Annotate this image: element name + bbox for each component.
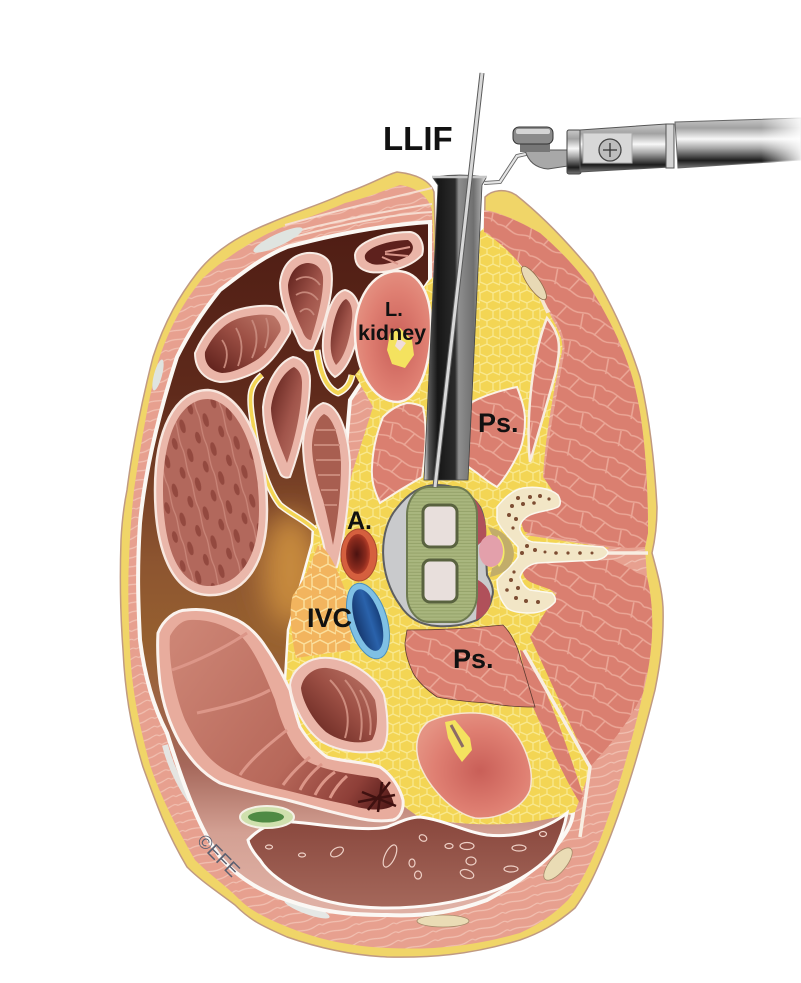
midline and lateral fascia lines — [524, 553, 648, 837]
tendon, left — [150, 359, 166, 391]
collar — [567, 130, 581, 174]
large colon, ascending — [155, 390, 267, 595]
retroperitoneal fat — [285, 228, 610, 824]
tendon, lower left — [165, 745, 190, 800]
upper wall layers — [278, 188, 432, 240]
elbow joint — [525, 150, 568, 169]
flank muscle and upper erector spinae — [484, 212, 648, 548]
retractor tube — [424, 175, 487, 480]
label: L. kidney: kidney — [358, 321, 426, 345]
label: LLIF: LLIF — [383, 120, 453, 157]
loop f — [303, 403, 350, 568]
shaft — [675, 118, 801, 168]
descending colon — [158, 609, 403, 821]
handle body — [580, 124, 670, 172]
loop a — [355, 232, 423, 272]
bone nodule, lower right — [539, 844, 577, 884]
subcutaneous fat layer — [120, 172, 663, 957]
label: A.: A. — [347, 507, 372, 535]
vertebral disc — [383, 485, 493, 626]
peritoneal cavity — [138, 222, 573, 915]
retractor arm and instrument handle — [484, 116, 801, 183]
label: L. kidney — [358, 299, 426, 345]
loop d — [323, 290, 360, 377]
left kidney — [355, 271, 431, 402]
cross-section of the body — [120, 172, 663, 957]
lower erector spinae — [523, 560, 652, 767]
abdominal wall muscle — [128, 185, 652, 949]
quadratus lumborum strip — [520, 650, 583, 803]
jejunal loop — [290, 658, 388, 752]
psoas muscle, lower — [405, 625, 535, 707]
ring — [666, 124, 674, 168]
tendon, bottom — [283, 896, 331, 922]
lower window — [423, 560, 457, 602]
plate — [583, 133, 632, 163]
white edge of mesenteric fat — [285, 527, 313, 680]
aponeurosis nodule — [518, 263, 550, 303]
cream fascia wedge — [488, 226, 550, 312]
thecal sac — [479, 535, 503, 567]
small bowel loops — [195, 232, 423, 568]
liver — [248, 813, 567, 908]
right kidney — [417, 713, 531, 818]
label: L. kidney: L. — [385, 299, 403, 321]
bone nodule, bottom — [417, 915, 469, 927]
upper window — [423, 505, 457, 547]
interbody cage implant — [407, 487, 477, 622]
connecting arm — [484, 153, 530, 183]
orange mesenteric fat — [291, 545, 352, 658]
psoas muscle, upper left — [372, 403, 426, 503]
psoas muscle, upper right — [463, 387, 525, 487]
golden shading in the cavity — [262, 512, 318, 628]
gallbladder — [240, 806, 294, 828]
right back muscle group — [484, 212, 652, 837]
label: IVC: IVC — [307, 603, 352, 633]
mesenteric fat strands — [250, 350, 352, 530]
label: Ps. lower: Ps. — [453, 644, 494, 674]
screw icon — [599, 139, 621, 161]
loop e — [263, 357, 310, 478]
tendon, upper left — [251, 223, 305, 257]
lumbar muscle strip — [529, 318, 559, 462]
ligamentum flavum — [488, 527, 514, 577]
loop b — [280, 253, 332, 350]
loop c — [195, 306, 290, 382]
spinal canal and lamina — [479, 487, 608, 613]
label: Ps. upper: Ps. — [478, 408, 519, 438]
swivel disc — [513, 127, 553, 144]
guide pin — [435, 73, 482, 487]
aorta — [341, 529, 377, 581]
inferior vena cava — [338, 578, 398, 664]
copyright mark: ©EFE — [192, 831, 243, 882]
